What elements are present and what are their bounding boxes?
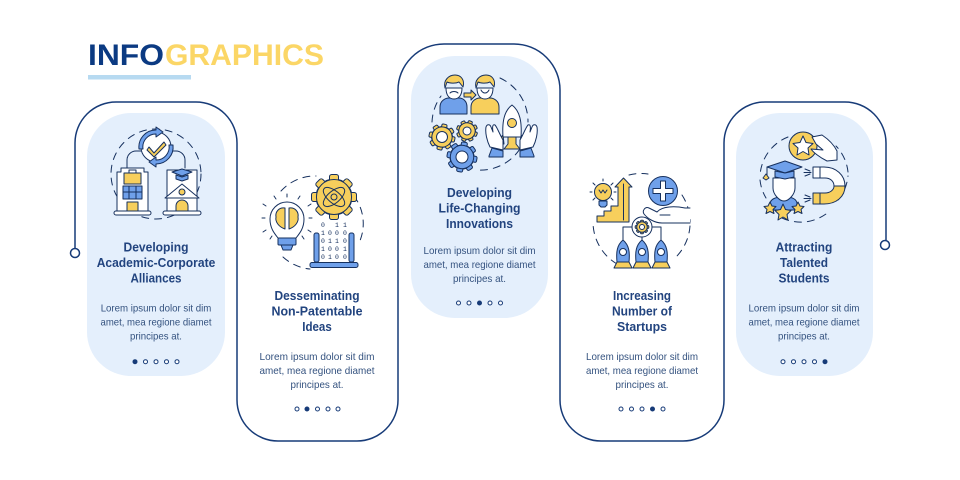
body text: amet, mea regione diamet (424, 260, 536, 271)
pagination dots (781, 360, 827, 364)
binary digits: 1 (335, 238, 339, 245)
heading: Number of (612, 304, 673, 318)
binary digits: 0 (343, 254, 347, 261)
heading: Ideas (302, 320, 332, 334)
binary digits: 0 (321, 238, 325, 245)
binary digits: 0 (328, 230, 332, 237)
heading: Desseminating (274, 289, 360, 303)
icon: ideas (262, 174, 363, 269)
pagination dots (456, 301, 502, 305)
title (88, 39, 324, 72)
pagination dots (133, 360, 179, 364)
heading: Non-Patentable (272, 304, 363, 318)
binary digits: 0 (335, 230, 339, 237)
heading: Alliances (130, 272, 182, 286)
body text: Lorem ipsum dolor sit dim (101, 304, 211, 314)
icon: innovations (427, 75, 537, 174)
body text (586, 352, 698, 391)
binary digits: 1 (343, 246, 347, 253)
binary digits: 0 (335, 254, 339, 261)
body text (260, 352, 375, 391)
body text: Lorem ipsum dolor sit dim (424, 246, 536, 257)
panel: academic-corporate alliances (87, 113, 225, 376)
heading (776, 240, 832, 286)
binary digits: 0 (343, 238, 347, 245)
heading (612, 289, 673, 334)
binary digits: 1 (321, 230, 325, 237)
pagination dots (619, 407, 665, 411)
body text: Lorem ipsum dolor sit dim (260, 352, 374, 363)
heading: Academic-Corporate (97, 256, 215, 270)
panel: attracting talented students (736, 113, 873, 376)
binary digits: 1 (321, 246, 325, 253)
body text: amet, mea regione diamet (586, 366, 698, 377)
body text: principes at. (453, 274, 506, 285)
body text: principes at. (778, 332, 830, 342)
title underline (88, 75, 191, 80)
icon: alliances (111, 127, 201, 219)
title: INFO (88, 39, 164, 72)
binary digits (321, 222, 347, 261)
heading: Innovations (446, 217, 513, 231)
body text: principes at. (130, 332, 182, 342)
heading: Life-Changing (438, 202, 520, 216)
binary digits: 0 (343, 230, 347, 237)
binary digits: 0 (321, 254, 325, 261)
heading: Developing (124, 240, 188, 254)
connecting outline (70, 44, 890, 441)
panel: life-changing innovations (411, 56, 548, 318)
body text: principes at. (616, 380, 668, 391)
body text: amet, mea regione diamet (260, 366, 375, 377)
body text (748, 304, 860, 342)
heading (272, 289, 363, 334)
pagination dots (295, 407, 340, 411)
heading: Students (778, 272, 830, 286)
heading: Startups (617, 320, 667, 334)
body text: amet, mea regione diamet (100, 318, 212, 328)
binary digits: 0 (335, 246, 339, 253)
heading (97, 240, 215, 286)
binary digits: 0 (321, 222, 325, 229)
heading: Developing (447, 186, 512, 200)
binary digits: 1 (335, 222, 339, 229)
body text: Lorem ipsum dolor sit dim (748, 304, 860, 314)
binary digits: 1 (328, 238, 332, 245)
heading: Attracting (776, 240, 832, 254)
binary digits: 0 (328, 246, 332, 253)
title: GRAPHICS (165, 39, 324, 72)
body text (100, 304, 212, 342)
binary digits: 1 (328, 254, 332, 261)
icon: startups (590, 174, 690, 268)
body text: Lorem ipsum dolor sit dim (586, 352, 698, 363)
heading: Increasing (613, 289, 671, 303)
body text: principes at. (290, 380, 344, 391)
icon: students (760, 132, 848, 222)
body text: amet, mea regione diamet (748, 318, 860, 328)
body text (424, 246, 536, 285)
panel: number of startups (586, 174, 698, 411)
panel: non-patentable ideas (260, 174, 375, 411)
binary digits: 1 (343, 222, 347, 229)
heading: Talented (780, 256, 828, 270)
heading (438, 186, 520, 231)
